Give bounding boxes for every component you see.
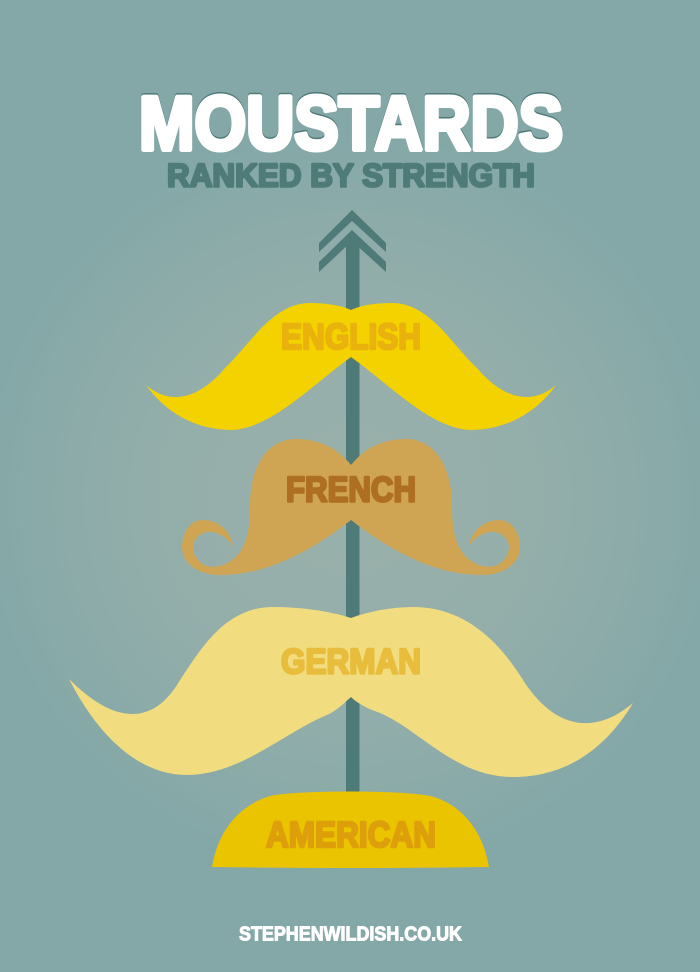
moustache: German xyxy=(69,607,633,777)
footer url: STEPHENWILDISH.CO.UK xyxy=(239,924,462,946)
label: German: GERMAN xyxy=(281,642,421,682)
label: English: ENGLISH xyxy=(281,316,421,357)
moustache: French xyxy=(182,439,520,575)
title: MOUSTARDS xyxy=(139,80,563,165)
label: French: FRENCH xyxy=(286,470,416,510)
subtitle: RANKED BY STRENGTH xyxy=(167,158,535,194)
moustache: American xyxy=(212,792,489,868)
moustache: English xyxy=(146,303,556,430)
arrow xyxy=(319,210,386,793)
label: American: AMERICAN xyxy=(266,814,436,855)
title: MOUSTARDS xyxy=(139,82,563,166)
